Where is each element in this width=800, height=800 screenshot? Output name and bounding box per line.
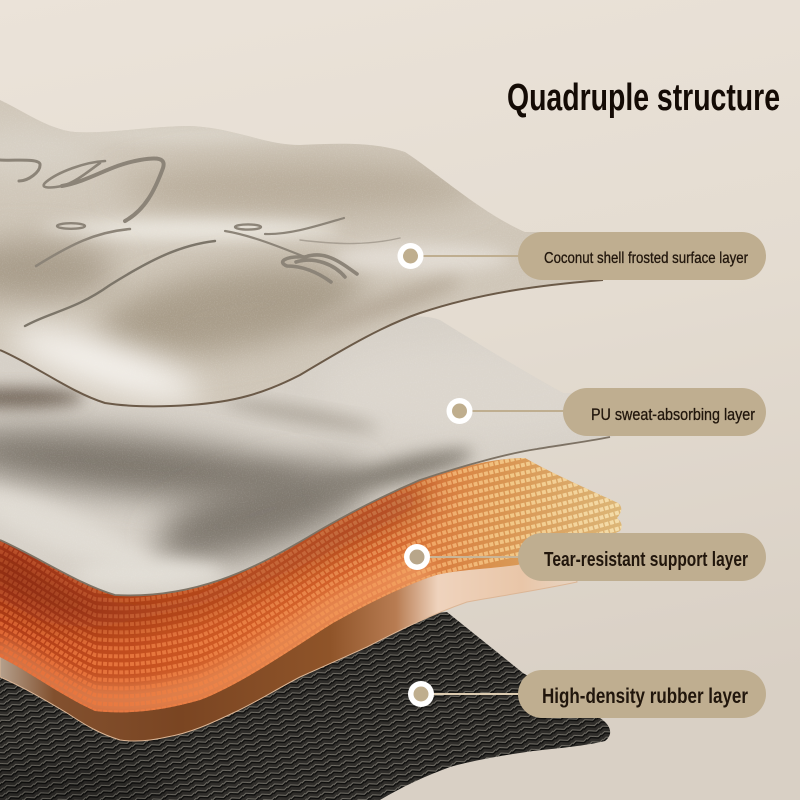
- line-art figure printed on surface: [0, 159, 400, 326]
- layer: copper backing band: [0, 550, 577, 741]
- layer: tear-resistant support: [0, 458, 622, 712]
- callout: coconut shell frosted surface layer: [398, 232, 766, 280]
- layer: coconut shell frosted surface: [0, 100, 589, 405]
- layer: PU sweat-absorbing: [0, 316, 614, 586]
- callout: coconut shell frosted surface layer: Coconut shell frosted surface layer: [544, 250, 749, 267]
- callout: PU sweat-absorbing layer: [446, 388, 766, 436]
- callout: PU sweat-absorbing layer: PU sweat-absorbing layer: [591, 406, 755, 424]
- callout: tear-resistant support layer: [404, 533, 766, 581]
- callout: high-density rubber layer: High-density rubber layer: [542, 684, 748, 708]
- layer: high-density rubber: [0, 612, 610, 800]
- callout: high-density rubber layer: [408, 670, 766, 718]
- edge of surface layer: [0, 280, 603, 406]
- edge of PU layer: [0, 437, 610, 595]
